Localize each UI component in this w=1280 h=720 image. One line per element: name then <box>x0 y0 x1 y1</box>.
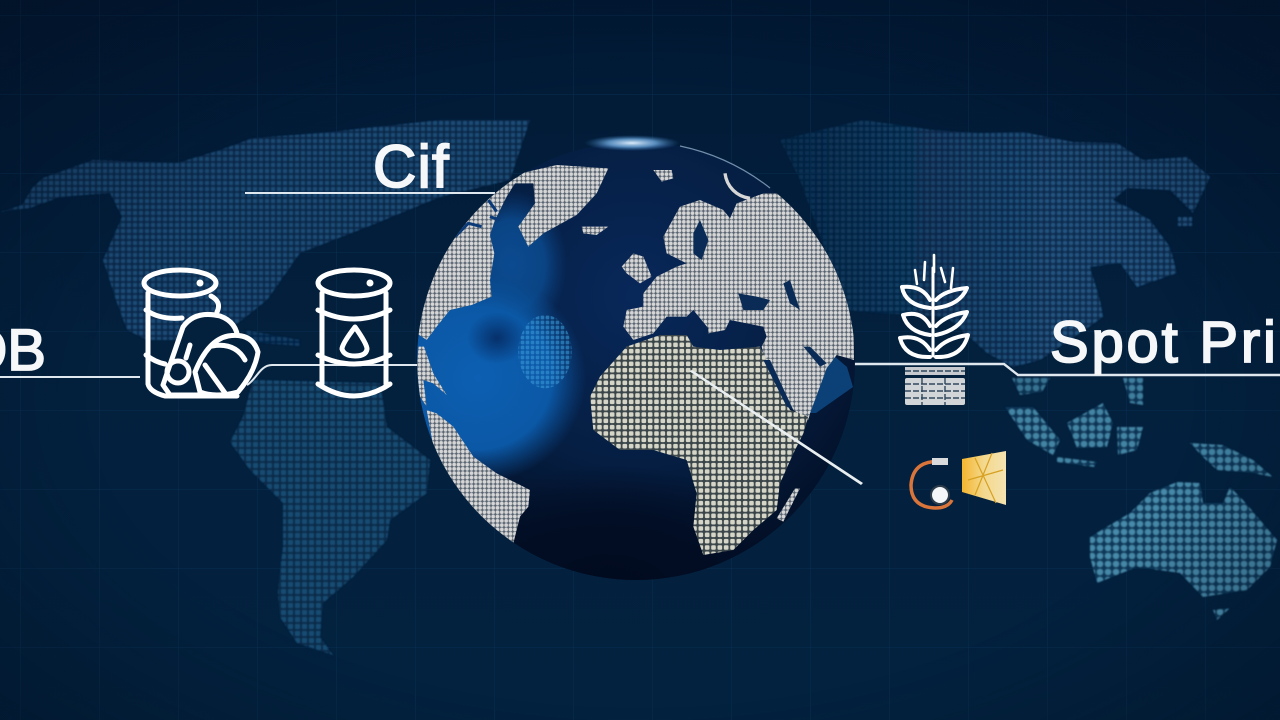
map region: Sulawesi <box>1117 427 1143 455</box>
hook tip <box>932 458 948 465</box>
ocean: north Atlantic blue <box>484 194 563 317</box>
icon: oil barrel with capsules <box>144 270 258 396</box>
map region: Central America <box>245 330 300 346</box>
ocean: dark shadow <box>471 316 523 361</box>
capsule back <box>163 314 238 395</box>
sea: Red Sea <box>763 360 793 410</box>
continent: Central America <box>417 347 447 407</box>
continent: South America <box>427 410 530 545</box>
island: Novaya Zemlya <box>725 173 750 198</box>
bung <box>366 280 374 286</box>
map region: Sumatra <box>1005 407 1060 455</box>
sea: Black Sea <box>738 293 770 310</box>
ocean: lower dark shade <box>538 483 707 580</box>
capsule front <box>195 335 258 395</box>
barrel body <box>146 293 237 396</box>
icon: orange hook and yellow panel <box>911 451 1006 508</box>
wheat plant <box>900 255 968 357</box>
ocean: Atlantic blue glow <box>417 287 582 477</box>
white ring <box>931 486 949 504</box>
sea: Persian Gulf <box>803 347 827 367</box>
connector line: FOB to oil barrels <box>0 365 425 385</box>
orange hook <box>911 461 952 508</box>
connector line: Spot Price <box>852 364 1280 375</box>
island: Iceland <box>582 227 608 235</box>
icon: plant in basket <box>900 255 968 405</box>
barrel hoops <box>318 310 390 364</box>
globe: rim line <box>680 146 770 188</box>
channels: Arctic straits <box>455 200 500 237</box>
panel details <box>968 453 1003 503</box>
continent: Africa <box>590 335 808 555</box>
map region: Australia <box>1090 482 1277 597</box>
ocean: dotted highlight <box>518 315 572 388</box>
world map: dotted backdrop <box>0 120 1277 655</box>
oil drop <box>342 327 367 356</box>
bung <box>196 280 204 286</box>
map region: Borneo <box>1067 403 1113 448</box>
globe: top rim highlight <box>584 135 680 151</box>
barrel lid <box>144 270 216 296</box>
connector line: Cif <box>245 192 495 194</box>
map region: North America <box>0 120 530 340</box>
map region: Eurasia <box>780 120 1210 367</box>
continents <box>417 165 854 555</box>
island: Madagascar <box>777 488 800 522</box>
yellow panel <box>962 451 1006 505</box>
map region: New Guinea <box>1190 443 1273 477</box>
barrel base <box>318 384 390 396</box>
barrel lid <box>318 270 390 296</box>
continent: Eurasia <box>623 193 854 420</box>
sea: Baltic <box>693 220 708 260</box>
map region: Indochina <box>1012 378 1050 395</box>
map region: Philippines <box>1123 378 1143 405</box>
ocean: Arabian Sea patch <box>808 355 853 413</box>
basket <box>905 367 965 405</box>
label: Cif: Cif <box>373 133 450 200</box>
sea: Caspian <box>783 280 800 310</box>
globe <box>417 136 855 580</box>
icon: oil barrel with drop <box>318 270 390 396</box>
map region: Tasmania <box>1213 608 1230 620</box>
barrel sides <box>322 293 386 384</box>
map region: South America <box>230 380 430 655</box>
continent: North America <box>417 175 515 340</box>
map region: Japan <box>1178 217 1192 226</box>
map region: Java <box>1057 457 1097 467</box>
capsule details <box>205 345 245 393</box>
island: Britain <box>622 253 652 283</box>
continent: Greenland <box>512 165 608 247</box>
pointer line across Africa <box>689 370 863 485</box>
island: Svalbard <box>653 170 673 182</box>
